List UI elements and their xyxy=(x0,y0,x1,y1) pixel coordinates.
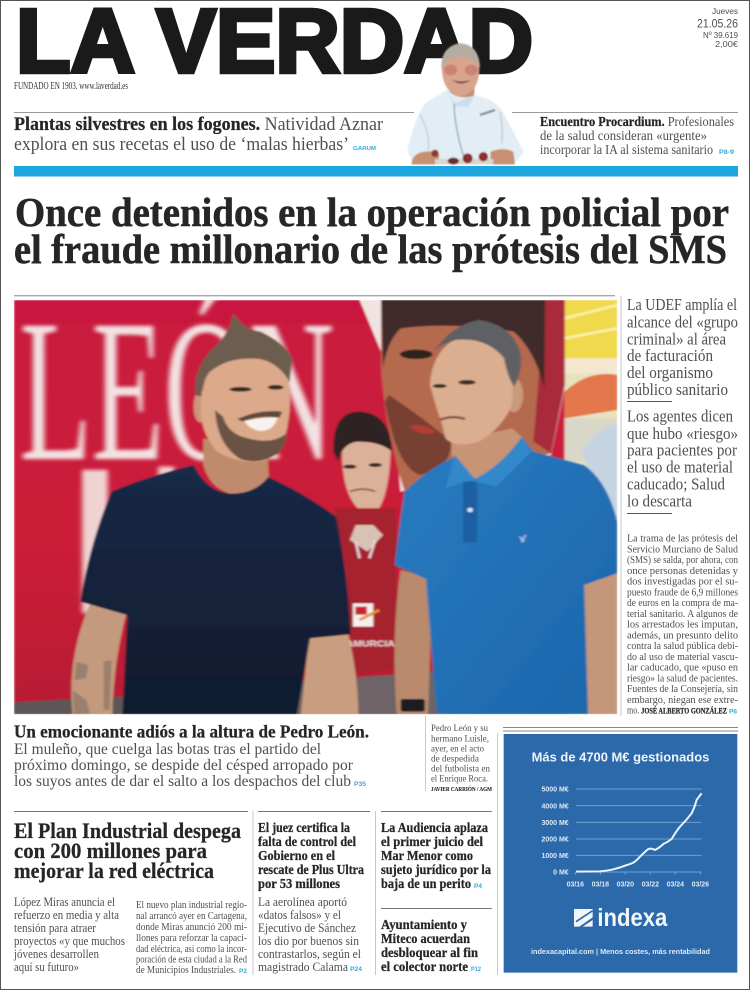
photo caption: Pedro León y su xyxy=(431,724,488,734)
story: Ayuntamiento y Miteco: Miteco acuerdan xyxy=(381,932,470,947)
y axis labels: 4000 M€ xyxy=(541,803,569,810)
photo story: Pedro León: los suyos antes de dar el salto a los despachos del club xyxy=(14,773,351,790)
deck: proyectos «y que muchos xyxy=(14,933,125,948)
photo caption: ayer, en el acto xyxy=(431,744,484,754)
poster young player: AMURCIA xyxy=(346,639,395,648)
subhead two: que hubo «riesgo» xyxy=(627,424,738,443)
body: dad eléctrica, así como la incor- xyxy=(136,944,247,955)
story: El juez certifica: magistrado Calama xyxy=(258,959,348,974)
story body text: además, un presunto delito xyxy=(627,630,738,641)
story body text: riesgo» la salud de pacientes. xyxy=(627,673,738,684)
story: El juez certifica: El juez certifica la xyxy=(258,821,350,836)
story: El juez certifica: «datos falsos» y el xyxy=(258,907,341,922)
body: El nuevo plan industrial regio- xyxy=(136,900,247,911)
photo: chef Natividad Aznar xyxy=(407,43,524,164)
issue date block xyxy=(697,6,738,49)
line chart xyxy=(541,787,709,889)
teaser: Plantas silvestres: Plantas silvestres en los fogones. Natividad Aznar xyxy=(14,114,384,135)
x axis labels: 03/22 xyxy=(642,882,659,889)
photo caption: hermano Luisle, xyxy=(431,734,489,744)
headline: El Plan Industrial despega xyxy=(14,818,241,843)
story: Plan Industrial xyxy=(13,818,248,976)
photo: Pedro León and his brother: LEÓN xyxy=(20,278,334,503)
story body text: once personas detenidas y xyxy=(627,566,738,577)
deck: jóvenes desarrollen xyxy=(13,946,99,961)
story: Ayuntamiento y Miteco: P12 xyxy=(471,966,481,973)
story: La Audiencia aplaza: Mar Menor como xyxy=(381,849,473,864)
story body text: puesto fraude de 6,9 millones xyxy=(627,587,738,598)
story: El juez certifica: Ejecutivo de Sánchez xyxy=(258,920,356,935)
photo story: Pedro León: Un emocionante adiós a la altura de Pedro León. xyxy=(14,722,369,742)
x axis labels: 03/16 xyxy=(567,882,584,889)
story: Ayuntamiento y Miteco: el colector norte xyxy=(381,960,468,975)
story: El juez certifica: falta de control del xyxy=(258,835,356,850)
story body text: P6 xyxy=(729,708,737,716)
body: P2 xyxy=(239,968,247,975)
y axis labels: 3000 M€ xyxy=(541,820,569,827)
poster face xyxy=(360,300,565,492)
subhead two: el uso de material xyxy=(627,457,733,476)
man in blue polo xyxy=(394,320,617,714)
story: La Audiencia aplaza: baja de un perito xyxy=(381,877,471,892)
story body text: los arrestados les imputan, xyxy=(627,620,738,631)
photo caption: el Enrique Roca. xyxy=(431,774,488,784)
story: La Audiencia aplaza xyxy=(381,821,491,892)
body: nal arrancó ayer en Cartagena, xyxy=(136,911,247,922)
teaser: Encuentro Procardium: P8-9 xyxy=(719,150,735,156)
story: La Audiencia aplaza: sujeto jurídico por la xyxy=(381,863,491,878)
story body text xyxy=(627,534,739,716)
x axis labels: 03/24 xyxy=(667,882,684,889)
story: El juez certifica: rescate de Plus Ultra xyxy=(258,863,364,878)
body xyxy=(136,900,248,976)
subhead one: público sanitario xyxy=(627,380,728,399)
photo story: Pedro León: P35 xyxy=(354,782,367,788)
main headline: Once detenidos en la operación policial por xyxy=(15,189,729,235)
chef jacket xyxy=(407,90,524,164)
teaser: Encuentro Procardium: Encuentro Procardium. Profesionales xyxy=(540,114,734,129)
y axis labels xyxy=(541,787,569,877)
blurred banner name xyxy=(20,278,334,613)
masthead: La Verdad xyxy=(14,0,533,92)
x axis labels: 03/26 xyxy=(692,882,709,889)
issue date block: Nº 39.619 xyxy=(703,30,738,40)
subhead one: de facturación xyxy=(627,346,713,365)
story: La Audiencia aplaza: La Audiencia aplaza xyxy=(381,821,488,836)
story body text: La trama de las prótesis del xyxy=(627,534,738,545)
story: Ayuntamiento y Miteco xyxy=(381,918,481,975)
chef hands and plate xyxy=(412,151,439,164)
subhead two: para pacientes por xyxy=(627,441,737,460)
story body text: lar caducado, que «puso en xyxy=(627,662,738,674)
x axis labels: 03/20 xyxy=(617,882,634,889)
story: El juez certifica: Gobierno en el xyxy=(258,849,335,864)
issue date block: Jueves xyxy=(712,6,738,16)
ad footer: indexacapital.com | Menos costes, más rentabilidad xyxy=(531,949,710,956)
story: El juez certifica: P24 xyxy=(350,966,362,973)
main headline xyxy=(14,189,729,272)
photo caption xyxy=(425,716,492,793)
story body text: Servicio Murciano de Salud xyxy=(627,544,738,555)
photo caption: JAVIER CARRIÓN / AGM xyxy=(431,785,492,793)
indexa logo xyxy=(574,904,668,932)
x axis labels xyxy=(567,882,709,889)
body: poración de esta ciudad a la Red xyxy=(136,955,248,966)
teaser: Plantas silvestres: explora en sus recetas el uso de ‘malas hierbas’ xyxy=(14,134,349,155)
story: El juez certifica: La aerolínea aportó xyxy=(258,894,347,909)
teaser: Encuentro Procardium: incorporar la IA al sistema sanitario xyxy=(540,142,713,157)
y axis labels: 2000 M€ xyxy=(541,837,569,844)
poster young player xyxy=(333,412,397,675)
photo caption: de despedida xyxy=(431,754,480,764)
y axis labels: 5000 M€ xyxy=(541,787,569,794)
story: La Audiencia aplaza: el primer juicio del xyxy=(381,835,483,850)
story: El juez certifica: por 53 millones xyxy=(258,877,340,892)
story body text: dos investigadas por el su- xyxy=(627,577,738,588)
y axis labels: 1000 M€ xyxy=(541,853,569,860)
deck xyxy=(13,894,125,974)
story body text: (SMS) se salda, por ahora, con xyxy=(627,555,738,566)
deck: aquí su futuro» xyxy=(14,959,79,974)
deck: tensión para atraer xyxy=(14,920,97,935)
story: El juez certifica xyxy=(258,821,364,974)
subhead one: criminal» al área xyxy=(627,329,726,348)
headline: mejorar la red eléctrica xyxy=(14,858,214,883)
subhead one xyxy=(627,295,738,399)
subhead one: del organismo xyxy=(627,363,713,382)
photo story: Pedro León: próximo domingo, se despide del césped arropado por xyxy=(14,757,354,774)
teaser: Encuentro Procardium xyxy=(540,114,735,157)
story body text: do al uso de material vascu- xyxy=(627,652,738,663)
data line xyxy=(576,793,702,872)
subhead two: lo descarta xyxy=(627,492,692,511)
founding line: FUNDADO EN 1903. www.laverdad.es xyxy=(14,81,128,92)
body: de Municipios Industriales. xyxy=(136,965,236,976)
story: Ayuntamiento y Miteco: desbloquear al fin xyxy=(381,946,478,961)
issue date block: 21.05.26 xyxy=(697,16,738,30)
chef neck and face xyxy=(448,82,475,97)
man in navy t-shirt xyxy=(71,313,358,714)
headline xyxy=(14,818,241,883)
story: El juez certifica: contrastarlos, según el xyxy=(258,946,361,961)
indexa logo: indexa xyxy=(597,904,668,932)
story body text: embargo, niegan ese extre- xyxy=(627,695,738,706)
story body text: de euros en la compra de ma- xyxy=(627,598,738,609)
subhead two xyxy=(627,407,738,511)
body: llones para reforzar la capaci- xyxy=(136,933,248,944)
story body text: contra la salud pública debi- xyxy=(627,641,738,652)
red banner background xyxy=(14,300,569,714)
photo story: Pedro León: El muleño, que cuelga las botas tras el partido del xyxy=(14,741,321,758)
body: donde Miras anunció 200 mi- xyxy=(136,922,248,933)
story body text: terial sanitario. A algunos de xyxy=(627,609,739,620)
blue section bar xyxy=(14,166,738,176)
ad title: Más de 4700 M€ gestionados xyxy=(532,749,709,764)
subhead two: caducado; Salud xyxy=(627,474,725,493)
photo story: Pedro León xyxy=(14,722,369,790)
story: Ayuntamiento y Miteco: Ayuntamiento y xyxy=(381,918,467,933)
story body text: mo. JOSÉ ALBERTO GONZÁLEZ xyxy=(627,706,727,716)
story: La Audiencia aplaza: P4 xyxy=(474,883,482,890)
story: El juez certifica: los dio por buenos sin xyxy=(258,933,359,948)
y axis labels: 0 M€ xyxy=(553,870,569,877)
issue date block: 2,00€ xyxy=(715,39,738,49)
x axis labels: 03/18 xyxy=(592,882,609,889)
subhead two: Los agentes dicen xyxy=(627,407,733,426)
teaser: Encuentro Procardium: de la salud consideran «urgente» xyxy=(540,128,707,143)
ground strip xyxy=(14,697,127,714)
story body text: Fuentes de la Consejería, sin xyxy=(627,684,738,695)
deck: López Miras anuncia el xyxy=(14,894,115,909)
right sidebar: story column xyxy=(620,295,739,716)
teaser: Plantas silvestres xyxy=(14,114,384,155)
panel: indexa advertisement xyxy=(504,734,737,973)
photo: Pedro León and his brother xyxy=(14,278,617,714)
deck: refuerzo en media y alta xyxy=(14,907,119,922)
headline: con 200 millones para xyxy=(14,838,207,863)
photo caption: del futbolista en xyxy=(431,764,490,774)
stadium at right xyxy=(565,300,617,714)
teaser: Plantas silvestres: GARUM xyxy=(353,146,376,152)
